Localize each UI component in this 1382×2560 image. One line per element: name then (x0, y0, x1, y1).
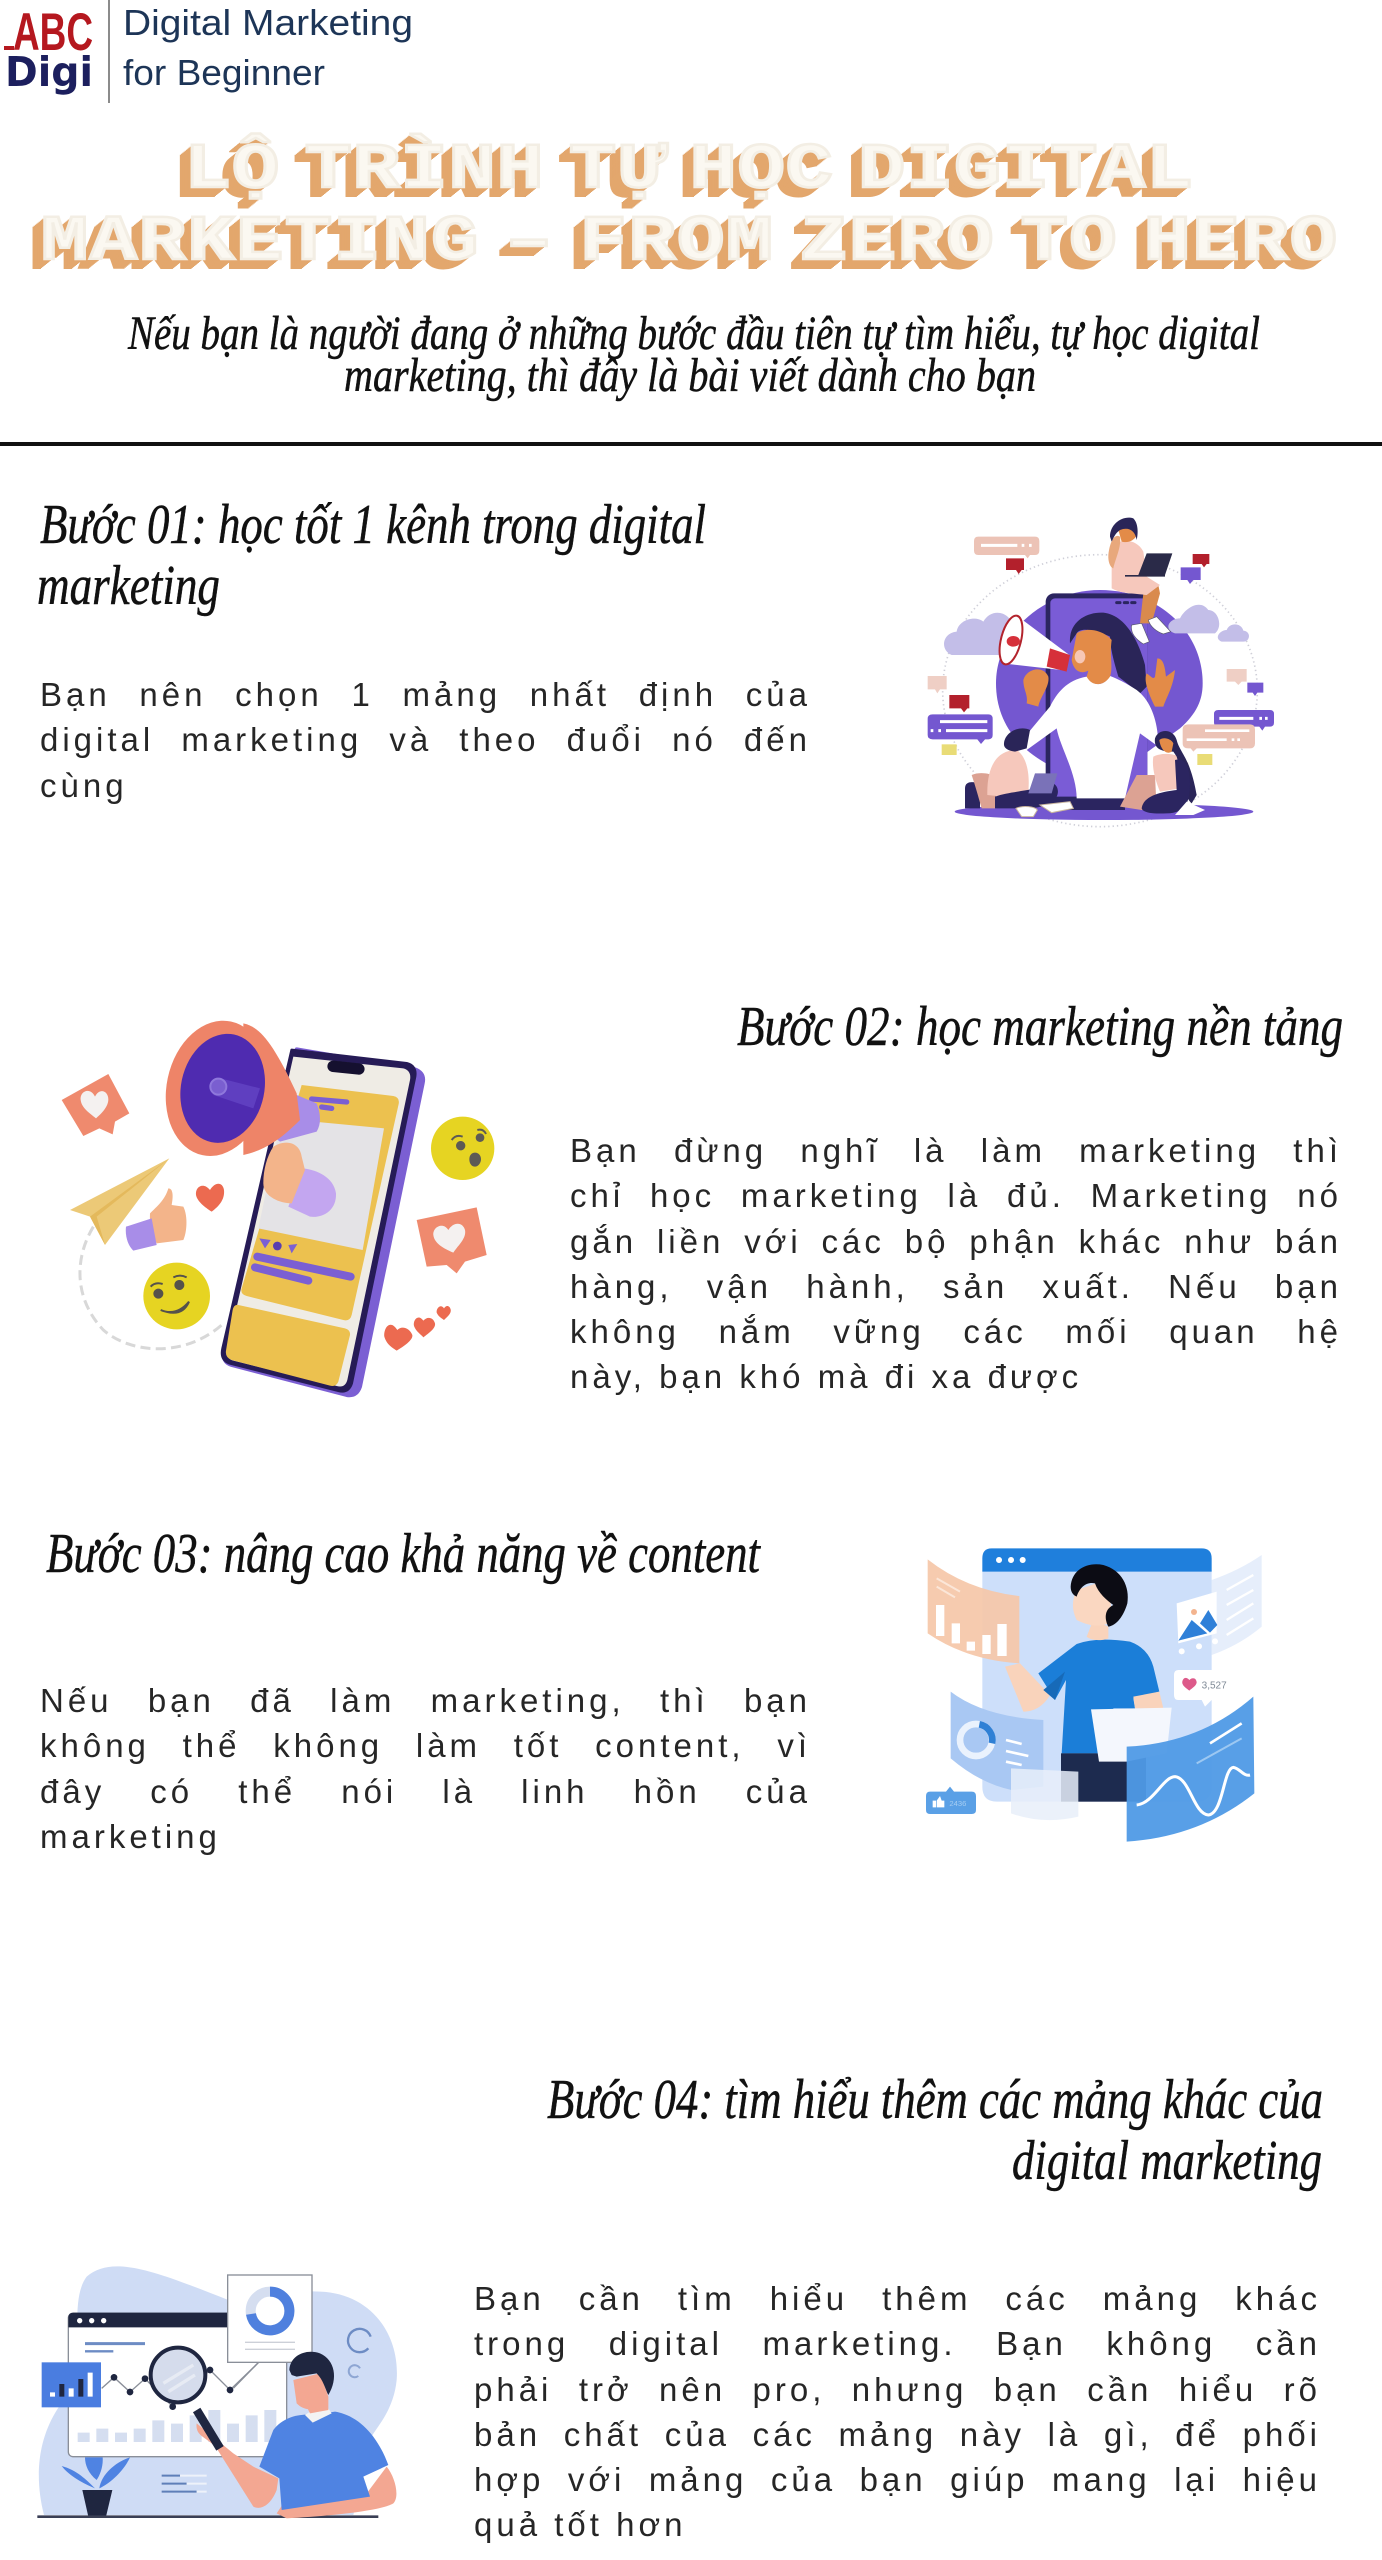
legs (995, 782, 1058, 808)
heart left (81, 1091, 108, 1118)
medium heart (414, 1317, 435, 1337)
panel lines (1210, 1723, 1242, 1743)
pants (1061, 1753, 1146, 1802)
panel text lines (937, 1578, 960, 1597)
subtitle (127, 307, 1260, 402)
step 3 body text: không thể không làm tốt content, vì (40, 1727, 811, 1764)
window body (982, 1570, 1212, 1802)
legs (1140, 585, 1160, 623)
lens (151, 2348, 205, 2402)
right panel lines (1227, 1575, 1253, 1635)
step 1 body text: cùng (40, 767, 128, 804)
like bubble left (62, 1074, 129, 1136)
face (293, 2373, 328, 2409)
thumb (933, 1796, 944, 1807)
dots (1179, 1638, 1218, 1654)
pink bubble right text lines (1187, 731, 1249, 740)
legs (1142, 759, 1190, 814)
megaphone band (1047, 648, 1070, 672)
panel (1127, 1697, 1254, 1842)
phone frame (1046, 593, 1147, 807)
phone notch (327, 1060, 365, 1075)
neck (307, 2397, 328, 2413)
bubble (1174, 1670, 1233, 1707)
navy bars (59, 2379, 83, 2397)
blue chart card (42, 2362, 101, 2407)
step 4 body text: phải trở nên pro, nhưng bạn cần hiểu rõ (474, 2371, 1321, 2408)
donut value (251, 2292, 289, 2330)
pink small bubble right (1227, 669, 1247, 685)
window body (68, 2313, 287, 2457)
face (431, 1117, 494, 1180)
laptop (1028, 773, 1057, 793)
step 2 body text: hàng, vận hành, sản xuất. Nếu bạn (570, 1268, 1342, 1305)
table line (37, 2513, 378, 2521)
hair (1071, 1564, 1128, 1627)
bottom right woman (1120, 731, 1205, 815)
card lines (245, 2342, 295, 2349)
big purple bubble left (928, 714, 993, 744)
step 4 body text (474, 2280, 1321, 2543)
central woman (995, 613, 1175, 798)
megaphone rim (995, 613, 1027, 667)
cushion (1120, 775, 1157, 810)
emoji smiling (143, 1263, 210, 1329)
subtitle line 2: marketing, thì đây là bài viết dành cho bạn (344, 349, 1036, 402)
step 1 heading line 2: marketing (37, 555, 220, 617)
browser window (982, 1548, 1212, 1802)
arm (1108, 536, 1120, 568)
step 4 body text: hợp với mảng của bạn giúp mang lại hiệu (474, 2461, 1321, 2498)
hair (1070, 613, 1147, 693)
dotted orbit ring (943, 555, 1257, 827)
purple disc (996, 590, 1203, 777)
logo mark: ABC: ABC (13, 3, 93, 62)
floor ellipse (955, 803, 1253, 820)
mountains (1178, 1610, 1217, 1641)
post text bars (255, 1257, 351, 1281)
brows (452, 1130, 486, 1140)
wave (1137, 1767, 1250, 1815)
step 1 heading (37, 494, 706, 617)
purple bubble right text lines (1219, 714, 1268, 723)
laptop (1125, 553, 1172, 577)
illustration: influencer with megaphone (928, 518, 1274, 828)
post title bars (312, 1099, 347, 1108)
face (143, 1263, 210, 1329)
orange chart panel (928, 1559, 1019, 1663)
dashed flight path (80, 1227, 222, 1349)
pink bubble right (1183, 724, 1255, 752)
caption line ends (180, 2476, 207, 2492)
face and neck (1072, 630, 1112, 684)
phone base (1055, 797, 1125, 810)
megaphone cone (243, 1023, 300, 1155)
donut base (251, 2292, 289, 2330)
hair (289, 2352, 334, 2395)
step 2 body text: chỉ học marketing là đủ. Marketing nó (570, 1177, 1342, 1214)
megaphone inner cylinder (213, 1077, 260, 1108)
speech bubbles (928, 537, 1274, 765)
top seated woman (1108, 518, 1172, 644)
step 1 body text: digital marketing và theo đuổi nó đến (40, 721, 811, 758)
big purple bubble text lines (931, 722, 987, 731)
text lines (85, 2339, 145, 2348)
thumb sleeve (126, 1218, 157, 1251)
like bubble right (417, 1207, 487, 1273)
hand on megaphone (1023, 669, 1049, 707)
thumb hand (150, 1188, 186, 1243)
post action icons (259, 1238, 297, 1253)
shirt (259, 2412, 388, 2510)
yellow bubble left (942, 744, 957, 755)
step 2 body text: Bạn đừng nghĩ là làm marketing thì (570, 1132, 1342, 1169)
face (1073, 1580, 1113, 1626)
pink small bubble left (928, 676, 947, 693)
lens glint (163, 2365, 195, 2392)
torso (1153, 754, 1188, 792)
logo divider (108, 0, 110, 103)
person (1005, 1564, 1163, 1802)
card (228, 2275, 312, 2362)
window dots (996, 1557, 1026, 1563)
logo mark: Digi: Digi (5, 48, 93, 96)
red bubble top left (1006, 558, 1024, 574)
card (1177, 1592, 1217, 1643)
post action dot (273, 1242, 282, 1250)
photo card (1177, 1592, 1218, 1654)
small ring (349, 2365, 360, 2377)
brows (151, 1276, 187, 1287)
large ring (348, 2329, 371, 2352)
step 3 body text: marketing (40, 1818, 221, 1855)
step 1 body text: Bạn nên chọn 1 mảng nhất định của (40, 676, 811, 713)
bar chart (78, 2410, 276, 2442)
text line short (85, 2348, 113, 2355)
phone screen (227, 1057, 410, 1387)
phone screen (1050, 598, 1147, 798)
donut card (228, 2275, 312, 2362)
analyst (197, 2352, 396, 2518)
bottom left woman (965, 728, 1073, 817)
window header (68, 2313, 230, 2327)
line chart dots (111, 2367, 233, 2410)
header rule (0, 442, 1382, 446)
second post card (226, 1305, 350, 1386)
near arm (277, 2467, 396, 2518)
laptop (1091, 1708, 1172, 1762)
panel secondary line (1197, 1738, 1242, 1763)
forearm behind laptop (1133, 1692, 1163, 1708)
line chart (102, 2363, 258, 2407)
donut (960, 1724, 992, 1756)
sleeve (288, 1168, 336, 1217)
step 2 body text: này, bạn khó mà đi xa được (570, 1358, 1082, 1395)
hair (1110, 518, 1138, 542)
megaphone inner ring (210, 1079, 226, 1095)
step 1 heading line 1: Bước 01: học tốt 1 kênh trong digital (40, 494, 706, 556)
white bars (50, 2373, 93, 2397)
bubble text lines (981, 541, 1032, 550)
illustration: phone with megaphone (62, 1020, 494, 1398)
hair (1155, 731, 1197, 803)
title line 1: LỘ TRÌNH TỰ HỌC DIGITAL (184, 135, 1194, 207)
panel (951, 1692, 1043, 1790)
phone dots (1117, 598, 1135, 607)
plane fold (90, 1158, 169, 1245)
purple small bubble right (1247, 683, 1263, 696)
pot (82, 2490, 112, 2517)
red bubble left (949, 695, 969, 712)
heart centre (196, 1184, 224, 1212)
step 2 body text (570, 1132, 1342, 1395)
clouds (944, 605, 1249, 655)
browser window (68, 2313, 287, 2457)
megaphone handle (273, 1095, 320, 1142)
eyes (153, 1280, 184, 1299)
panel (928, 1559, 1019, 1663)
illustration: analyst with magnifier (37, 2266, 397, 2518)
phone purple shell (224, 1049, 423, 1395)
arm (1005, 1663, 1050, 1712)
handle (197, 2410, 220, 2448)
sneakers (1131, 617, 1171, 644)
yellow bubble right (1197, 754, 1212, 765)
step 4 body text: trong digital marketing. Bạn không cần (474, 2325, 1321, 2362)
phone (222, 1049, 423, 1395)
pink bubble top left (974, 537, 1039, 558)
torso (987, 750, 1029, 797)
step 3 body text (40, 1682, 811, 1855)
megaphone rim (154, 1011, 280, 1166)
phone (1046, 593, 1147, 807)
caption lines (162, 2476, 197, 2492)
title line 2: MARKETING – FROM ZERO TO HERO (41, 207, 1339, 279)
window header (982, 1548, 1212, 1572)
step 1 body text (40, 676, 811, 804)
frosted card (1011, 1768, 1078, 1820)
pink cushion (972, 773, 997, 808)
background blob (39, 2266, 397, 2515)
paper plane (70, 1158, 169, 1245)
card (42, 2362, 101, 2407)
shoes (1016, 802, 1073, 817)
donut highlight (979, 1724, 992, 1743)
connector line (233, 2363, 258, 2388)
megaphone with hand (154, 1011, 336, 1217)
count: 2436 (949, 1799, 966, 1808)
hearts trail (384, 1306, 451, 1351)
logo tagline line 2: for Beginner (123, 52, 325, 93)
shirt (1017, 676, 1158, 798)
step 4 body text: bản chất của các mảng này là gì, để phối (474, 2416, 1321, 2453)
far arm (197, 2423, 278, 2508)
shirt (1038, 1640, 1159, 1753)
emoji surprised (431, 1117, 494, 1180)
torso (1112, 541, 1160, 595)
dark cushion (965, 782, 980, 808)
window dots (77, 2318, 106, 2323)
eyes and mouth (456, 1133, 484, 1167)
hand (263, 1143, 305, 1203)
step 4 body text: Bạn cần tìm hiểu thêm các mảng khác (474, 2280, 1321, 2317)
panel lines (1006, 1740, 1028, 1765)
smile (161, 1302, 189, 1313)
chart bars (936, 1605, 1007, 1656)
sleeve shade (1043, 1672, 1065, 1700)
plant (62, 2457, 130, 2517)
small heart (437, 1306, 451, 1320)
red bubble top right (1193, 554, 1209, 567)
head (1118, 526, 1137, 542)
phone navy bezel (222, 1050, 415, 1391)
post image (258, 1121, 384, 1250)
purple bubble top right (1181, 567, 1201, 584)
logo tagline line 1: Digital Marketing (123, 2, 413, 43)
thumbs-up count pill (926, 1787, 976, 1814)
neck (1087, 1620, 1108, 1640)
magnifier (151, 2348, 220, 2448)
step 2 body text: không nắm vững các mối quan hệ (570, 1313, 1342, 1350)
thumbs up (126, 1188, 186, 1251)
logo (4, 0, 413, 103)
donut panel (951, 1692, 1043, 1790)
sneaker (1175, 802, 1205, 815)
step 2 body text: gắn liền với các bộ phận khác như bán (570, 1223, 1342, 1260)
megaphone heart (1007, 636, 1020, 647)
megaphone cone (1008, 616, 1069, 671)
post card yellow (241, 1085, 399, 1320)
face (1159, 738, 1173, 753)
step 3 heading: Bước 03: nâng cao khả năng về content (46, 1523, 761, 1585)
head and hair (1004, 728, 1030, 752)
rings (348, 2329, 371, 2377)
like count: 3,527 (1202, 1680, 1227, 1691)
plane body (70, 1158, 169, 1245)
large heart (384, 1325, 412, 1351)
step 4 body text: quả tốt hơn (474, 2506, 686, 2543)
step 4 heading (547, 2069, 1323, 2192)
step 3 body text: Nếu bạn đã làm marketing, thì bạn (40, 1682, 811, 1719)
illustration: man with floating content panels (926, 1548, 1262, 1842)
leaves (62, 2457, 130, 2488)
step 3 body text: đây có thể nói là linh hồn của (40, 1773, 811, 1810)
pill (926, 1787, 976, 1814)
wave chart panel (1127, 1697, 1254, 1842)
heart (1182, 1678, 1197, 1691)
collar (305, 2408, 332, 2423)
logo dash (4, 46, 14, 50)
megaphone inside (170, 1026, 275, 1151)
mouth (1075, 650, 1085, 663)
like count bubble (1174, 1670, 1233, 1707)
right pale panel (1212, 1555, 1262, 1655)
heart right (433, 1224, 465, 1253)
sun (1191, 1609, 1197, 1615)
raised hand (1146, 658, 1175, 707)
purple bubble right (1214, 710, 1274, 731)
